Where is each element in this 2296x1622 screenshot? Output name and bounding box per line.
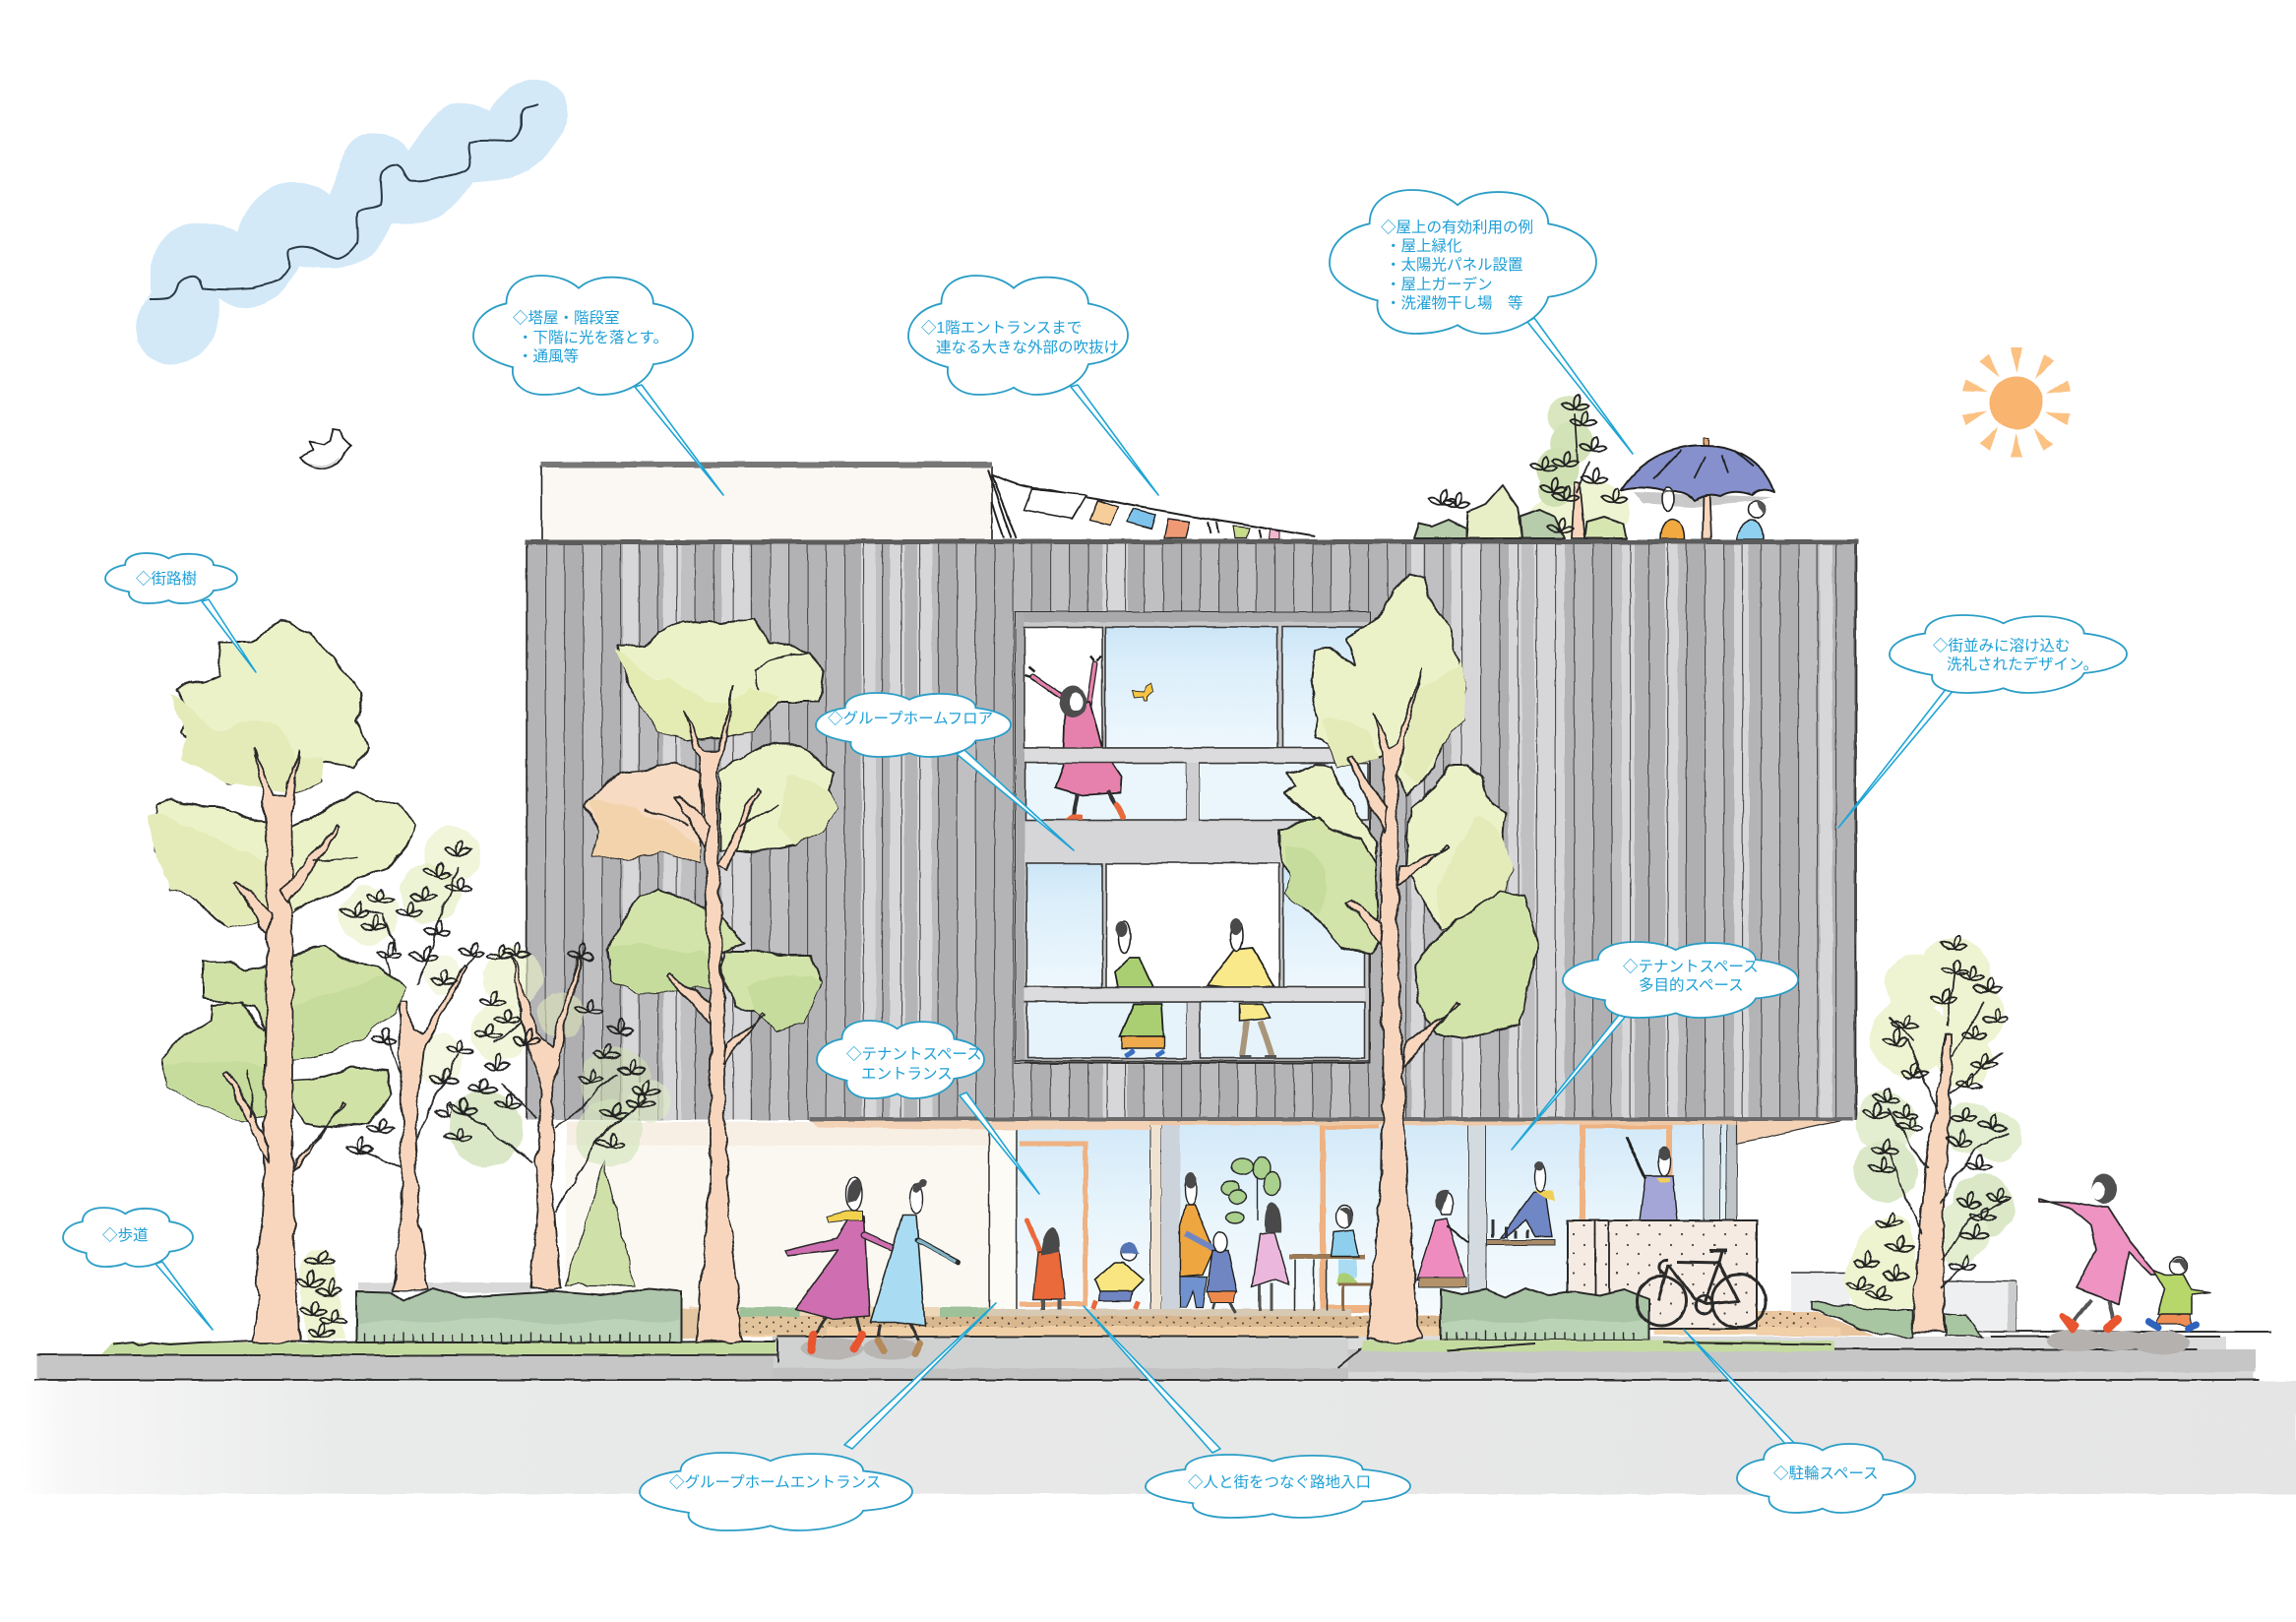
callout: group home entrance: ◇グループホームエントランス <box>669 1473 881 1491</box>
callout: rooftop use: ・屋上緑化 <box>1386 237 1462 255</box>
butterfly <box>1132 683 1153 701</box>
panes: upper floor <box>1024 627 1368 1058</box>
callout: design: ◇街並みに溶け込む <box>1933 637 2071 655</box>
sun <box>1962 347 2071 458</box>
rooftop plants <box>1414 395 1630 538</box>
window wall <box>1016 612 1370 1063</box>
tree: slender tree C <box>445 943 671 1288</box>
callout: group home floor: ◇グループホームフロア <box>828 710 993 727</box>
tree: large tree D in front of facade <box>587 617 838 1342</box>
callout: penthouse: ・通風等 <box>518 347 579 365</box>
tree: slender tree B <box>340 827 484 1290</box>
person: woman in yellow <box>1208 918 1276 1057</box>
callout: alley entrance <box>1084 1306 1410 1518</box>
callout: penthouse: ・下階に光を落とす。 <box>518 329 668 346</box>
callout: multipurpose tenant space: ◇テナントスペース <box>1623 958 1759 975</box>
callout: void to entrance <box>908 276 1158 495</box>
callout: multipurpose tenant space: 多目的スペース <box>1639 976 1744 994</box>
hedge and low wall left <box>356 1282 987 1342</box>
callout: street trees <box>105 553 256 672</box>
window bands <box>1016 748 1370 1061</box>
person: woman in pink at stool <box>1417 1190 1468 1287</box>
person: girl in red at entrance <box>1027 1220 1065 1310</box>
callout: group home entrance <box>640 1303 996 1530</box>
callout: group home floor <box>816 693 1074 850</box>
right site wall <box>1791 1273 2016 1332</box>
person: man with raised arm <box>1626 1137 1677 1220</box>
laundry line <box>988 469 1315 539</box>
road <box>20 1332 2296 1494</box>
sky cloud <box>136 81 567 364</box>
group of people and plant in lobby <box>1180 1157 1381 1313</box>
person: woman in blue walking <box>870 1179 958 1353</box>
tree: large street tree A <box>148 620 415 1342</box>
ground strips left <box>101 1341 1834 1354</box>
callout: alley entrance: ◇人と街をつなぐ路地入口 <box>1188 1473 1371 1491</box>
boy in blue <box>1186 1233 1220 1252</box>
person: man in green <box>1115 921 1164 1056</box>
conifer <box>566 1163 634 1285</box>
callout: rooftop use: ・洗濯物干し場 等 <box>1386 294 1523 312</box>
callout: tenant entrance: エントランス <box>861 1066 953 1083</box>
person: woman in pink walking <box>2039 1174 2190 1354</box>
callout: tenant entrance <box>817 1021 1039 1194</box>
shrub near right tree <box>1811 1212 1982 1336</box>
callout: penthouse: ◇塔屋・階段室 <box>513 309 620 327</box>
small shrub <box>297 1249 346 1341</box>
facade wall <box>525 539 1858 1121</box>
person: boy in yellow <box>1093 1243 1144 1309</box>
bird <box>300 429 350 468</box>
person: child in green <box>2148 1257 2210 1329</box>
callout: design <box>1838 615 2127 828</box>
table <box>1289 1254 1365 1260</box>
callout: void to entrance: 連なる大きな外部の吹抜け <box>936 339 1119 356</box>
hedge right <box>1441 1287 1648 1341</box>
callout: rooftop use <box>1330 190 1633 454</box>
penthouse <box>541 462 992 540</box>
callout: design: 洗礼されたデザイン。 <box>1947 655 2098 673</box>
callout: sidewalk: ◇歩道 <box>102 1226 149 1244</box>
tree: right street tree <box>1855 936 2021 1332</box>
callout: rooftop use: ◇屋上の有効利用の例 <box>1381 218 1533 236</box>
tree: large tree E in front of facade <box>1279 574 1538 1341</box>
crown <box>175 620 368 793</box>
person: man at counter <box>1486 1160 1555 1245</box>
woman in lilac <box>1252 1232 1289 1287</box>
callout: multipurpose tenant space <box>1512 942 1798 1150</box>
concrete counter block <box>1568 1220 1757 1329</box>
trunk <box>255 747 299 1342</box>
callout: rooftop use: ・太陽光パネル設置 <box>1386 256 1523 274</box>
callout: sidewalk <box>63 1208 213 1330</box>
man in orange <box>1180 1277 1207 1307</box>
bicycle <box>1637 1251 1766 1328</box>
person: pink girl waving <box>1025 656 1123 819</box>
person: woman in purple walking <box>785 1177 918 1359</box>
umbrella and rooftop people <box>1621 438 1774 539</box>
callout: void to entrance: ◇1階エントランスまで <box>921 319 1082 337</box>
plant <box>1221 1157 1280 1223</box>
callout: penthouse <box>473 276 723 495</box>
callout: bicycle parking: ◇駐輪スペース <box>1773 1465 1879 1482</box>
floor and paving <box>689 1307 1875 1337</box>
callout: street trees: ◇街路樹 <box>136 570 197 588</box>
callout: tenant entrance: ◇テナントスペース <box>846 1045 982 1063</box>
callout: bicycle parking <box>1684 1330 1915 1513</box>
callout: rooftop use: ・屋上ガーデン <box>1386 275 1493 293</box>
ground floor <box>566 1119 1848 1317</box>
seated person <box>1331 1230 1359 1257</box>
